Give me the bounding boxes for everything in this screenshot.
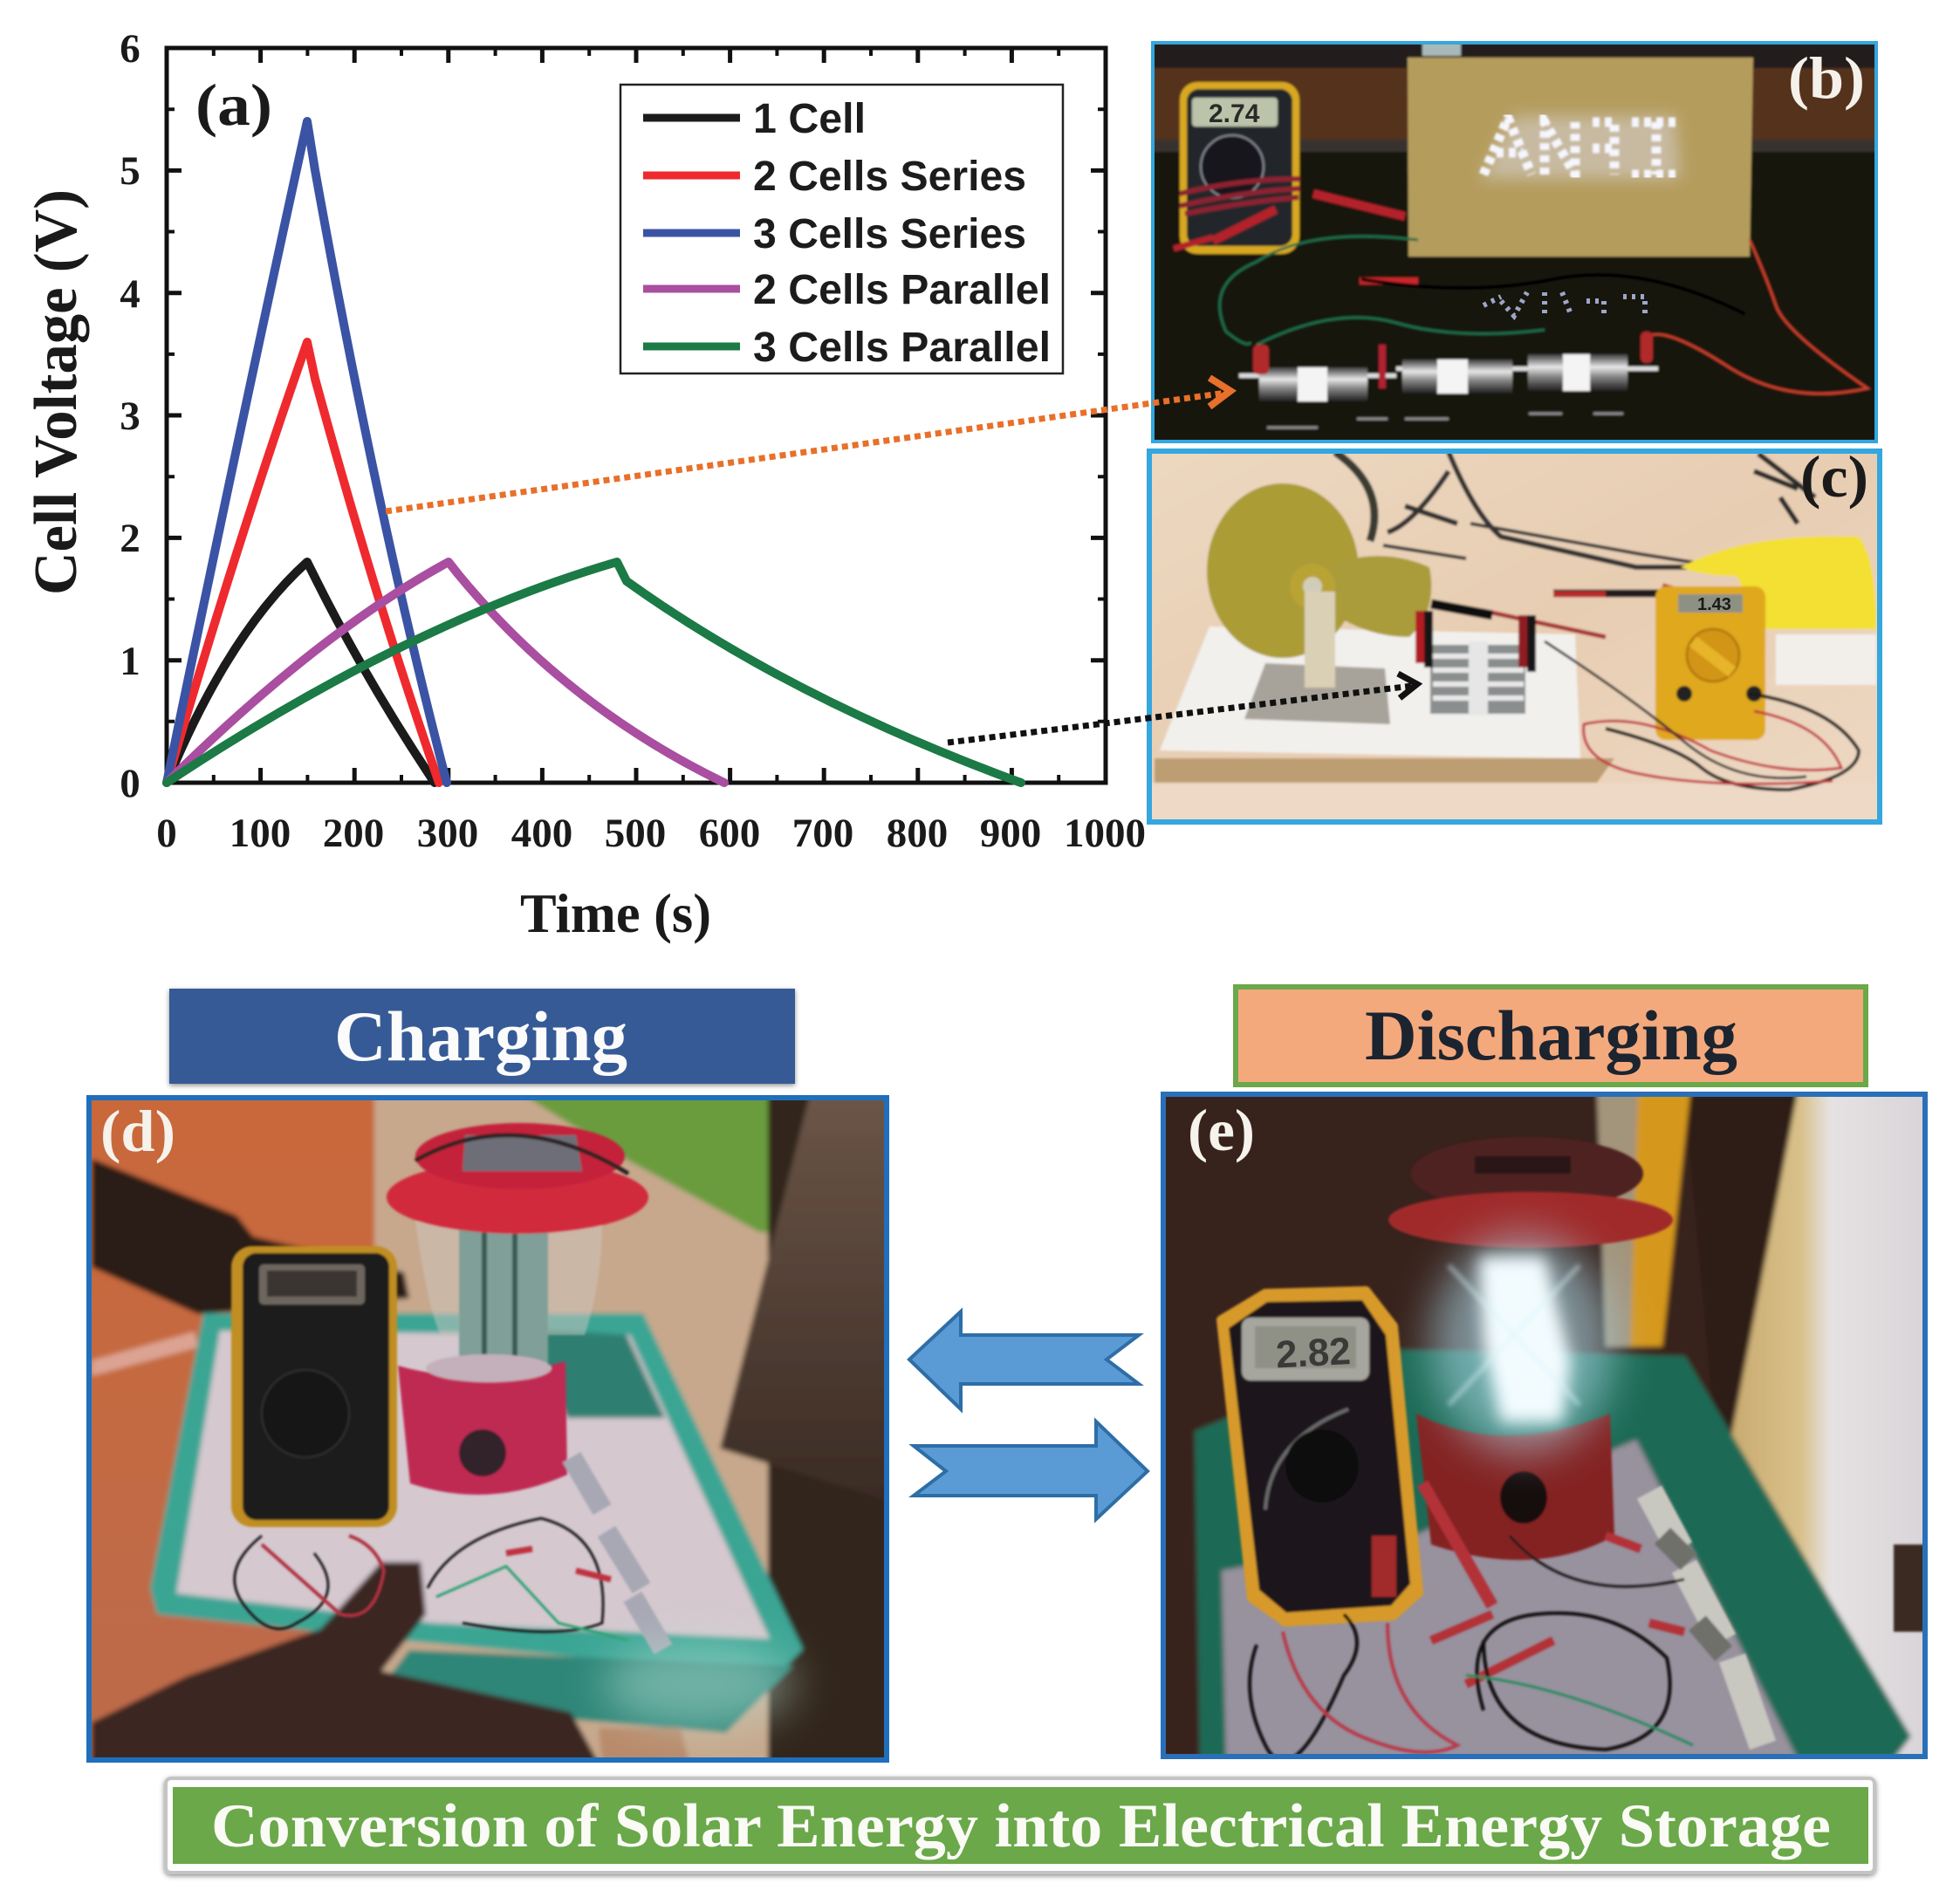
- curve: 2 cells series: [167, 342, 439, 783]
- lantern top: [1411, 1137, 1643, 1210]
- panel label d: (d): [100, 1098, 175, 1164]
- glare at tray corner: [602, 1640, 794, 1728]
- legend: 2 Cells Series: [753, 154, 1026, 200]
- panel label c: (c): [1800, 443, 1868, 510]
- meter reading: 1.43: [1697, 595, 1731, 614]
- y axis tick labels: 3: [120, 394, 140, 439]
- meter reading: 2.74: [1209, 99, 1260, 128]
- heading: Discharging: [1236, 987, 1866, 1085]
- banner: conversion title: [166, 1778, 1874, 1873]
- heading: Charging: Charging: [334, 997, 627, 1076]
- banner: conversion title: Conversion of Solar Energy into Electrical Energy Storage: [211, 1792, 1831, 1860]
- x axis tick labels: 100: [230, 811, 291, 856]
- curves: [167, 121, 1021, 783]
- x axis tick labels: 600: [699, 811, 760, 856]
- photo border: [1149, 451, 1880, 822]
- plot frame with axis ticks: [167, 48, 1106, 783]
- lantern base: [398, 1361, 567, 1495]
- x axis tick labels: 0: [156, 811, 177, 856]
- arrow: charging to discharging: [914, 1421, 1148, 1519]
- panel: photo (b) LED display with three cells in series: [1153, 42, 1876, 442]
- lantern cap: [387, 1161, 648, 1234]
- legend: [620, 85, 1063, 373]
- legend: 3 Cells Series: [753, 211, 1026, 257]
- y axis tick labels: 6: [120, 26, 140, 72]
- curve: 3 cells parallel: [167, 562, 1021, 783]
- photo border: [1163, 1094, 1925, 1757]
- lantern glass and battery column: [415, 1222, 602, 1335]
- legend: 3 Cells Parallel: [753, 325, 1051, 371]
- meter reading: 2.82: [1275, 1330, 1352, 1376]
- heading: Charging: [169, 989, 795, 1084]
- photo border: [89, 1098, 887, 1760]
- lantern base: [1416, 1414, 1614, 1560]
- clips and wires: [1422, 1483, 1492, 1606]
- LED glow on card: [1480, 116, 1681, 179]
- y axis tick labels: 0: [120, 761, 140, 806]
- legend: 1 Cell: [753, 96, 866, 142]
- x axis tick labels: [156, 811, 1146, 856]
- cells and wires in tray: [572, 1457, 663, 1649]
- panel label a: (a): [195, 72, 272, 138]
- x axis tick labels: 1000: [1064, 811, 1146, 856]
- curve: 3 cells series: [167, 121, 447, 783]
- x axis tick labels: 300: [417, 811, 478, 856]
- x axis tick labels: 800: [887, 811, 948, 856]
- panel: photo (e) discharging lantern: [1161, 1092, 1928, 1761]
- x axis title: Time (s): [520, 882, 711, 944]
- x axis tick labels: 400: [511, 811, 572, 856]
- multimeter: [1222, 1291, 1418, 1621]
- y axis tick labels: 4: [120, 271, 140, 317]
- lantern light glow: [1431, 1235, 1614, 1453]
- y axis tick labels: 2: [120, 516, 140, 561]
- y axis tick labels: [120, 26, 140, 806]
- x axis tick labels: 900: [980, 811, 1041, 856]
- multimeter: [231, 1246, 397, 1527]
- y axis tick labels: 1: [120, 639, 140, 684]
- x axis tick labels: 700: [792, 811, 853, 856]
- arrow: orange dotted link to panel b: [386, 378, 1230, 511]
- x axis tick labels: 200: [323, 811, 384, 856]
- curve: 2 cells parallel: [167, 562, 724, 783]
- photo border: [1153, 43, 1876, 442]
- y axis tick labels: 5: [120, 148, 140, 194]
- heading: Discharging: Discharging: [1365, 996, 1737, 1075]
- arrow: discharging to charging: [909, 1312, 1139, 1409]
- x axis tick labels: 500: [605, 811, 666, 856]
- panel label e: (e): [1188, 1097, 1255, 1163]
- panel: photo (d) charging lantern: [86, 1095, 889, 1763]
- curve: 1 cell: [167, 562, 435, 783]
- arrow: black dotted link to panel c: [948, 674, 1417, 743]
- panel: chart (a) voltage versus time: [23, 26, 1146, 944]
- panel: photo (c) fan powered by cells: [1149, 443, 1880, 822]
- cells along tray: [1649, 1492, 1763, 1745]
- legend: 2 Cells Parallel: [753, 267, 1051, 313]
- y axis title: Cell Voltage (V): [23, 189, 90, 595]
- panel label b: (b): [1788, 45, 1865, 111]
